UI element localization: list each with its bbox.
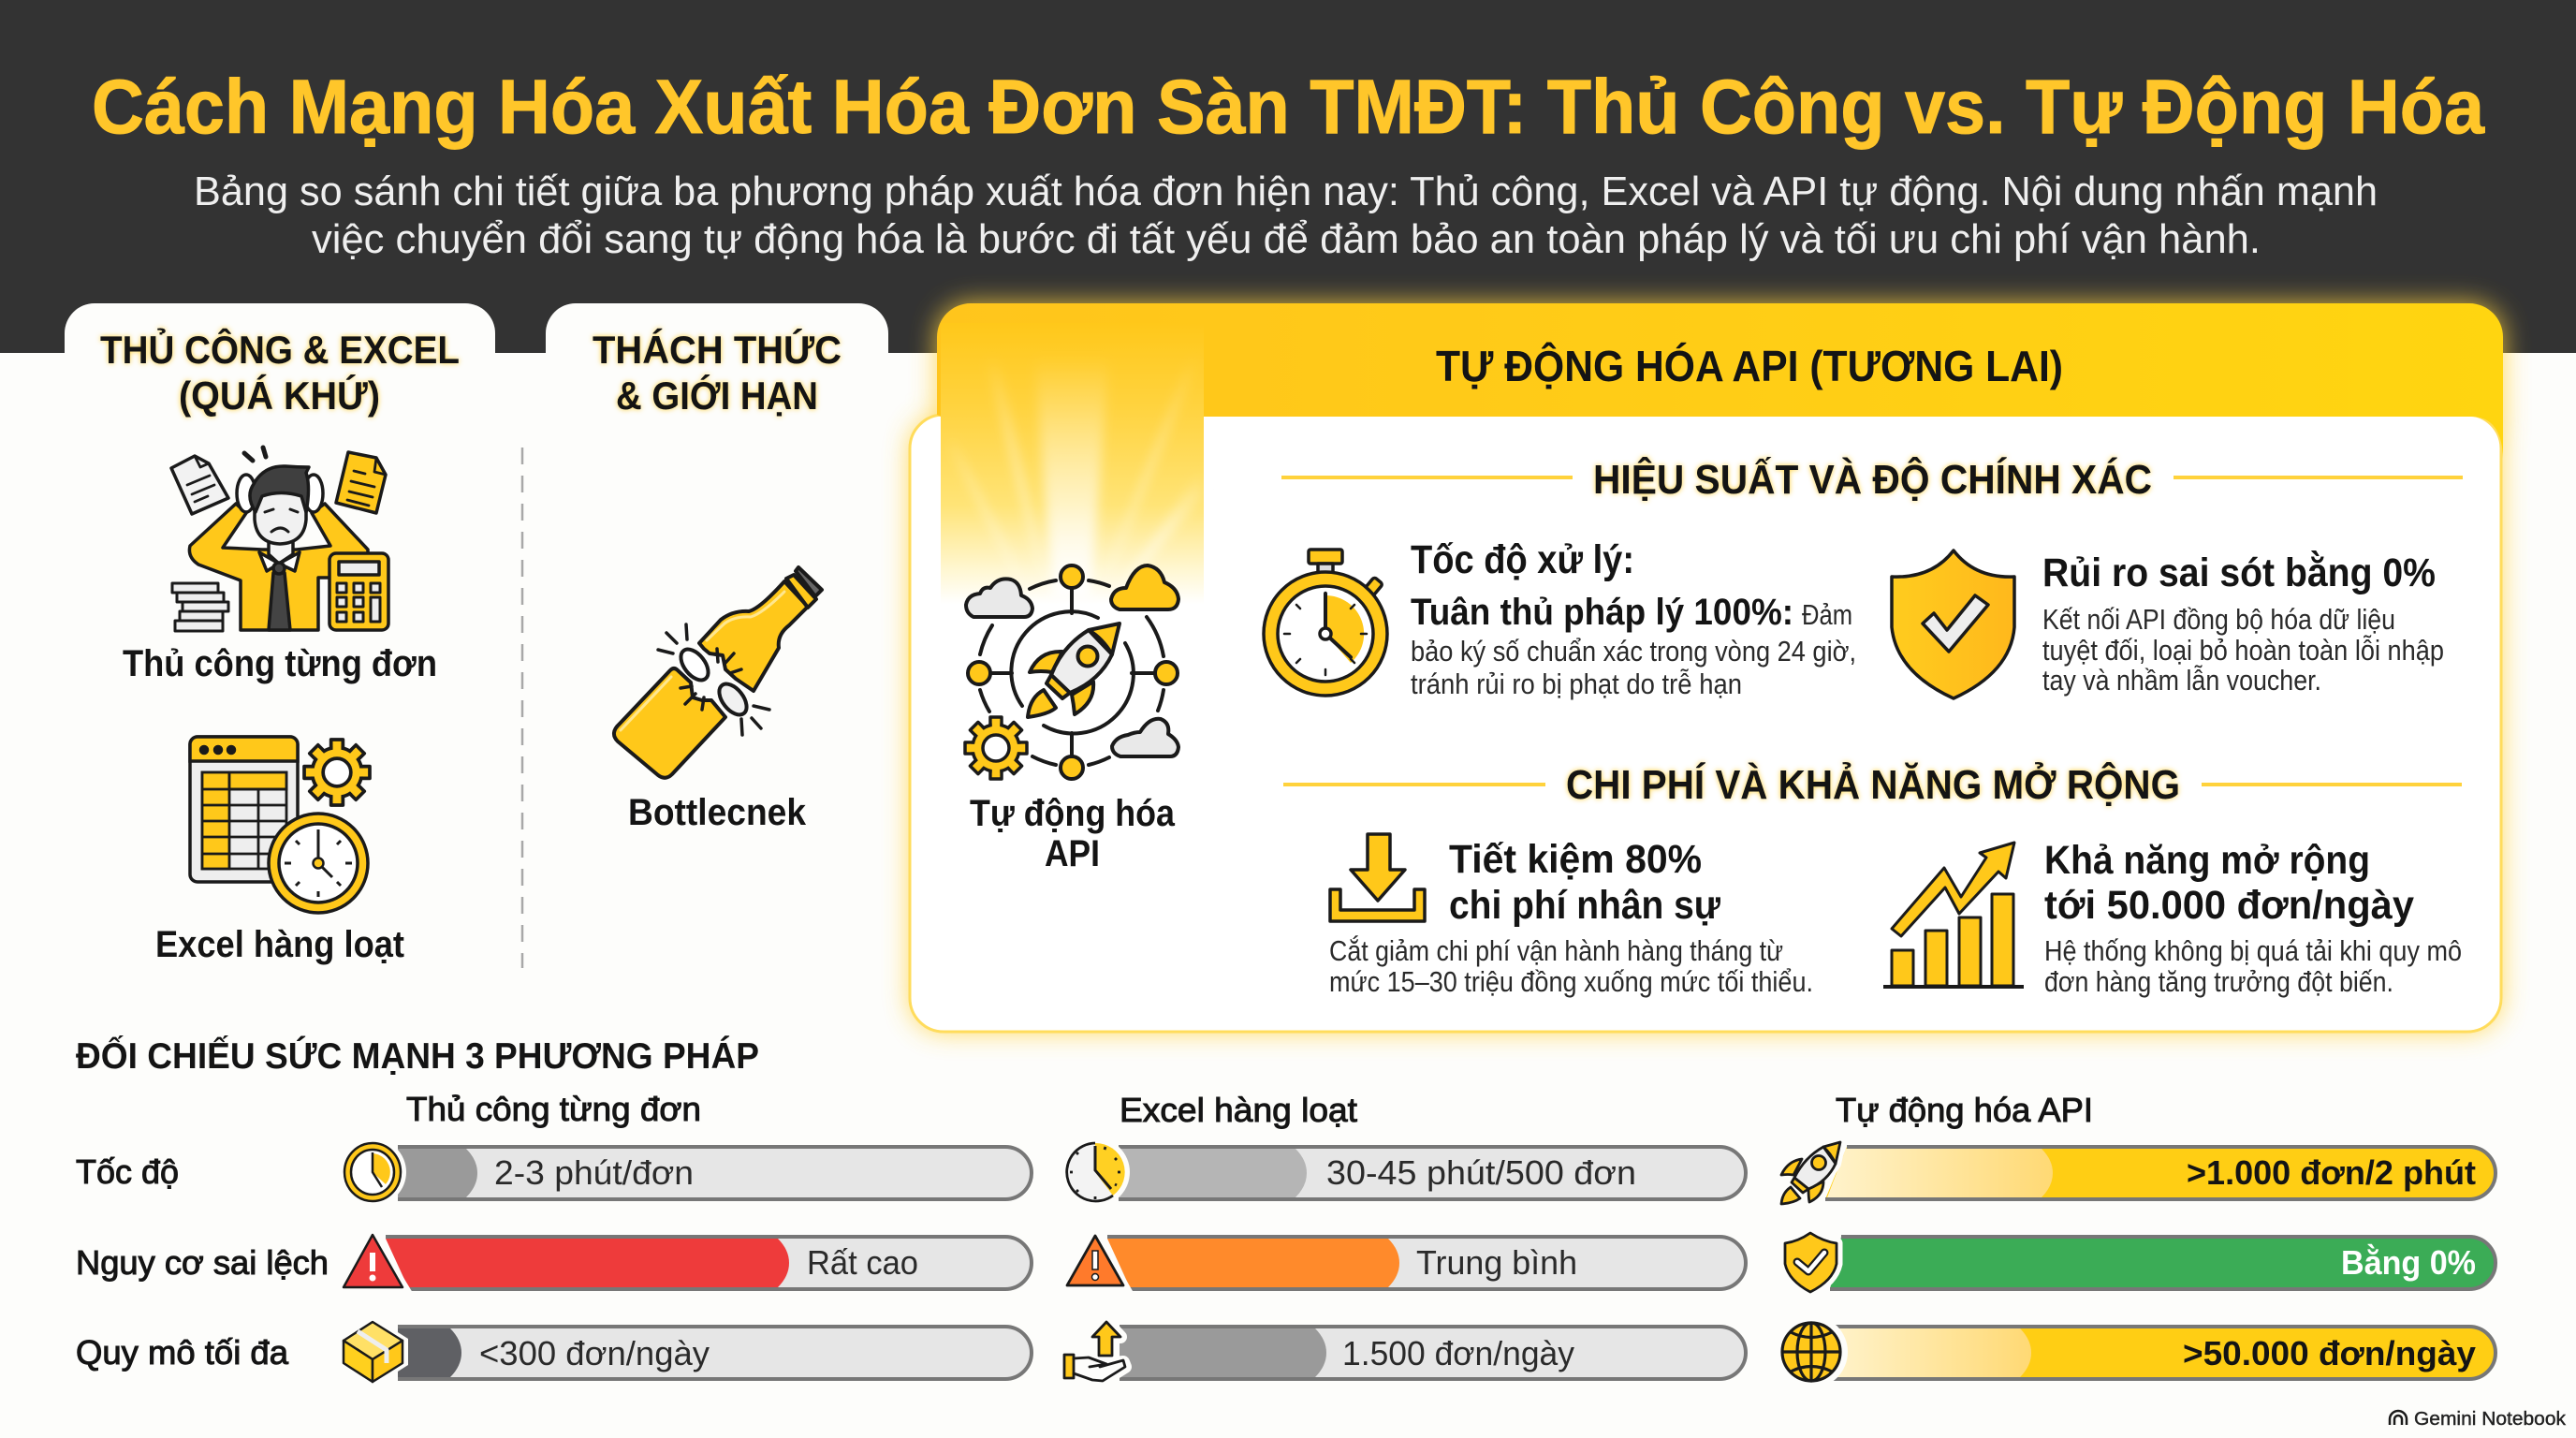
bar: tốc độ excel: 30-45 phút/500 đơn <box>1326 1153 1636 1192</box>
heading: thủ công và excel <box>100 327 460 418</box>
white card <box>910 415 2501 1032</box>
column with light rays <box>941 323 1204 604</box>
text: khả năng mở rộng: đơn hàng tăng trưởng đột biến. <box>2044 965 2393 998</box>
label: bottleneck: Bottlecnek <box>628 792 807 833</box>
subtitle: Bảng so sánh chi tiết giữa ba phương pháp xuất hóa đơn hiện nay: Thủ công, Excel và API tự động. Nội dung nhấn mạnh <box>194 169 2378 214</box>
heading: thách thức: & GIỚI HẠN <box>616 373 818 418</box>
text: rủi ro sai sót: tay và nhầm lẫn voucher. <box>2042 664 2321 697</box>
icon: stopwatch <box>1264 550 1387 696</box>
bar: quy mô excel: 1.500 đơn/ngày <box>1342 1334 1574 1372</box>
text: tốc độ và tuân thủ: tránh rủi ro bị phạt do trễ hạn <box>1411 668 1742 700</box>
text: khả năng mở rộng: Khả năng mở rộng <box>2044 838 2370 883</box>
row labels <box>76 1152 329 1372</box>
text: khả năng mở rộng: Hệ thống không bị quá tải khi quy mô <box>2044 934 2462 967</box>
bar: quy mô api: >50.000 đơn/ngày <box>2183 1334 2476 1372</box>
title: Cách Mạng Hóa Xuất Hóa Đơn Sàn TMĐT: Thủ Công vs. Tự Động Hóa <box>92 65 2485 150</box>
icon: shield <box>1892 550 2014 698</box>
icon: small shield <box>1785 1233 1837 1292</box>
text: rủi ro sai sót <box>2042 550 2444 697</box>
text: rủi ro sai sót: Rủi ro sai sót bằng 0% <box>2042 550 2436 595</box>
bar: tốc độ thủ công: 2-3 phút/đơn <box>494 1153 694 1192</box>
text: tốc độ và tuân thủ: Tuân thủ pháp lý 100%: <box>1411 592 1793 633</box>
subtitle: việc chuyển đổi sang tự động hóa là bước đi tất yếu để đảm bảo an toàn pháp lý và tối ưu chi phí vận hành. <box>312 216 2261 262</box>
text: tốc độ và tuân thủ: bảo ký số chuẩn xác trong vòng 24 giờ, <box>1411 635 1856 668</box>
column: tự động hóa api <box>1775 1091 2496 1388</box>
panel glow <box>910 303 2503 1032</box>
heading: thủ công và excel: THỦ CÔNG & EXCEL <box>100 327 460 372</box>
gold header <box>937 303 2503 459</box>
header band <box>0 0 2576 353</box>
icon: box <box>338 1316 408 1387</box>
icon: clock <box>339 1138 406 1206</box>
column: thủ công từng đơn <box>332 1090 1032 1387</box>
panel: thách thức và giới hạn <box>546 303 888 833</box>
bar: quy mô excel <box>1120 1327 1746 1379</box>
row labels: Quy mô tối đa <box>76 1333 289 1372</box>
bar: tốc độ thủ công <box>398 1147 1032 1199</box>
icon: small rocket <box>1781 1142 1840 1204</box>
text: tiết kiệm: Cắt giảm chi phí vận hành hàng tháng từ <box>1329 934 1783 967</box>
label: tự động hóa api: API <box>1045 833 1100 874</box>
heading: thách thức: THÁCH THỨC <box>593 327 842 372</box>
label: excel hàng loạt: Excel hàng loạt <box>155 924 404 965</box>
row labels: Nguy cơ sai lệch <box>76 1243 329 1282</box>
text: tiết kiệm: mức 15–30 triệu đồng xuống mức tối thiểu. <box>1329 965 1813 998</box>
bar: nguy cơ excel <box>1107 1237 1746 1289</box>
bar: nguy cơ thủ công: Rất cao <box>807 1243 918 1282</box>
label: tự động hóa api: Tự động hóa <box>970 793 1176 834</box>
bar: nguy cơ thủ công <box>386 1237 1032 1289</box>
heading: thách thức <box>593 327 842 418</box>
bar: nguy cơ api <box>1830 1237 2496 1289</box>
icon: download savings <box>1330 834 1425 921</box>
icon: red warning <box>332 1226 413 1293</box>
bar: tốc độ excel <box>1119 1147 1746 1199</box>
bar: tốc độ api <box>1825 1147 2496 1199</box>
panel: tự động hóa api <box>910 303 2503 1032</box>
label: thủ công từng đơn: Thủ công từng đơn <box>123 643 437 684</box>
text: tốc độ và tuân thủ: Tốc độ xử lý: <box>1411 537 1634 582</box>
panel: thủ công và excel <box>65 303 495 965</box>
icon: rocket network <box>965 565 1178 779</box>
icon: hand with arrow <box>1064 1322 1125 1381</box>
text: khả năng mở rộng <box>2044 838 2462 998</box>
text: rủi ro sai sót: tuyệt đối, loại bỏ hoàn toàn lỗi nhập <box>2042 634 2444 667</box>
column: excel hàng loạt <box>1058 1091 1746 1381</box>
icon: excel sheet with gear and clock <box>190 737 370 913</box>
label: tự động hóa api <box>970 793 1176 874</box>
divider <box>521 448 523 968</box>
text: tiết kiệm <box>1329 837 1813 998</box>
text: tốc độ và tuân thủ <box>1411 537 1856 700</box>
column title: Excel hàng loạt <box>1120 1091 1357 1129</box>
bar: quy mô api <box>1830 1327 2496 1379</box>
icon: orange warning <box>1058 1226 1133 1291</box>
heading: tự động hóa api: TỰ ĐỘNG HÓA API (TƯƠNG LAI) <box>1436 342 2063 390</box>
heading: thủ công và excel: (QUÁ KHỨ) <box>179 373 380 418</box>
bar: nguy cơ excel: Trung bình <box>1416 1243 1577 1282</box>
column title: Thủ công từng đơn <box>406 1090 701 1128</box>
section heading: đối chiếu: ĐỐI CHIẾU SỨC MẠNH 3 PHƯƠNG PHÁP <box>76 1034 759 1077</box>
section heading: chi phí: CHI PHÍ VÀ KHẢ NĂNG MỞ RỘNG <box>1566 760 2180 808</box>
text: tiết kiệm: chi phí nhân sự <box>1449 883 1721 928</box>
section heading: hiệu suất: HIỆU SUẤT VÀ ĐỘ CHÍNH XÁC <box>1593 455 2152 503</box>
bar: quy mô thủ công: <300 đơn/ngày <box>479 1334 710 1372</box>
logo: gemini notebook: Gemini Notebook <box>2414 1409 2567 1430</box>
icon: half clock <box>1061 1137 1130 1207</box>
icon: stressed man <box>171 448 388 631</box>
text: tiết kiệm: Tiết kiệm 80% <box>1449 837 1702 882</box>
bar: quy mô thủ công <box>398 1327 1032 1379</box>
text: khả năng mở rộng: tới 50.000 đơn/ngày <box>2044 883 2414 928</box>
bar: nguy cơ api: Bằng 0% <box>2341 1242 2476 1282</box>
icon: broken bottle <box>614 567 822 778</box>
text: tốc độ và tuân thủ: Đảm <box>1802 598 1852 631</box>
column title: Tự động hóa API <box>1836 1091 2093 1129</box>
text: rủi ro sai sót: Kết nối API đồng bộ hóa dữ liệu <box>2042 603 2395 636</box>
icon: growth chart <box>1883 843 2024 987</box>
row labels: Tốc độ <box>76 1152 179 1191</box>
subtitle <box>194 169 2378 262</box>
icon: globe <box>1775 1315 1848 1388</box>
bar: tốc độ api: >1.000 đơn/2 phút <box>2187 1153 2476 1192</box>
